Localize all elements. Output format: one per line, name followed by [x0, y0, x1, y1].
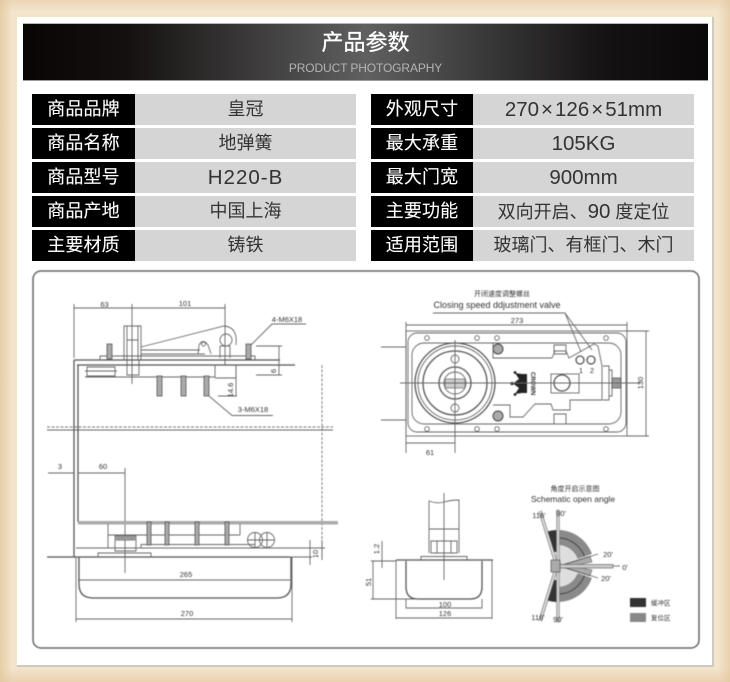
row: origin: 中国上海 [210, 201, 282, 221]
callout: 3-M6X18: 3-M6X18 [238, 405, 268, 414]
diagram: opening angle: 0' [622, 563, 628, 572]
top plan view: 2 [590, 366, 594, 375]
row: max load: 最大承重 [386, 133, 458, 153]
legend [630, 598, 671, 622]
front section view [364, 493, 493, 619]
diagram: opening angle: 20' [603, 550, 613, 559]
row: name [32, 128, 356, 159]
row: dimensions: 外观尺寸 [386, 99, 458, 119]
parameter table [32, 94, 694, 261]
legend: 复位区 [651, 613, 671, 622]
row: max door width [371, 162, 694, 193]
side elevation: floor pan [47, 462, 338, 622]
row: scope: 玻璃门、有框门、木门 [494, 235, 674, 255]
row: material: 主要材质 [47, 235, 120, 255]
diagram: opening angle: Schematic open angle [531, 494, 615, 504]
row: function [371, 196, 694, 227]
side elevation: floor pan: 3 [58, 462, 62, 471]
callout: 4-M6X18 [251, 315, 306, 345]
crown logo [510, 371, 535, 396]
row: material: 铸铁 [228, 235, 264, 255]
callout: 4-M6X18: 4-M6X18 [272, 315, 302, 324]
side elevation: floor pan: 10 [311, 550, 320, 558]
diagram: opening angle: 90' [556, 509, 566, 518]
row: max door width: 900mm [549, 166, 618, 189]
top plan view [381, 289, 649, 457]
top plan view: Closing speed ddjustment valve [433, 300, 561, 310]
side elevation: top mount [47, 299, 333, 560]
row: brand [32, 94, 356, 125]
buffer zone [546, 530, 558, 552]
top plan view: 1 [579, 366, 583, 375]
diagram: opening angle: 角度开启示意图 [550, 484, 600, 493]
diagram: opening angle: 116' [532, 511, 546, 520]
row: dimensions [371, 94, 694, 125]
side elevation: floor pan: 270 [181, 609, 193, 618]
row: max load [371, 128, 694, 159]
row: max load: 105KG [552, 132, 615, 155]
top plan view: 273 [511, 316, 523, 325]
diagram: opening angle: 20' [601, 574, 611, 583]
row: model [32, 162, 356, 193]
callout: 3-M6X18 [209, 396, 273, 416]
front section view: 1.2 [372, 544, 381, 554]
row: function: 主要功能 [386, 201, 458, 221]
row: model: 商品型号 [47, 167, 120, 187]
diagram: opening angle: 116' [531, 613, 545, 622]
header banner [23, 23, 708, 81]
legend: 缓冲区 [651, 598, 671, 607]
subtitle: PRODUCT PHOTOGRAPHY [289, 61, 442, 75]
front section view: 126 [439, 609, 451, 618]
diagram: opening angle [531, 484, 671, 624]
crown logo: CROWN [529, 372, 535, 395]
side elevation: floor pan: 265 [180, 570, 192, 579]
row: origin: 商品产地 [47, 201, 120, 221]
row: scope: 适用范围 [386, 235, 458, 255]
top plan view: 开闭速度调整螺丝 [474, 289, 530, 298]
front section view: 100 [439, 600, 451, 609]
row: brand: 皇冠 [228, 99, 264, 119]
row: name: 商品名称 [47, 133, 120, 153]
row: origin [32, 196, 356, 227]
side elevation: top mount: 63 [100, 300, 109, 309]
top plan view: 130 [636, 377, 645, 389]
row: brand: 商品品牌 [47, 99, 120, 119]
diagram: opening angle: 90' [553, 615, 563, 624]
panel border [33, 271, 699, 648]
row: dimensions: 270×126×51mm [505, 98, 662, 121]
side elevation: floor pan: 60 [99, 462, 107, 471]
title: 产品参数 [321, 30, 410, 55]
side elevation: top mount: 14.6 [226, 383, 235, 397]
row: max door width: 最大门宽 [386, 167, 458, 187]
row: material [32, 230, 356, 261]
row: function: 双向开启、90 度定位 [498, 200, 669, 223]
row: scope [371, 230, 694, 261]
row: model: H220-B [208, 166, 283, 189]
reset zone [558, 530, 594, 602]
row: name: 地弹簧 [218, 133, 272, 153]
top plan view: 61 [426, 448, 434, 457]
front section view: 51 [364, 578, 373, 586]
side elevation: top mount: 101 [179, 299, 191, 308]
side elevation: top mount: 6 [269, 369, 278, 373]
